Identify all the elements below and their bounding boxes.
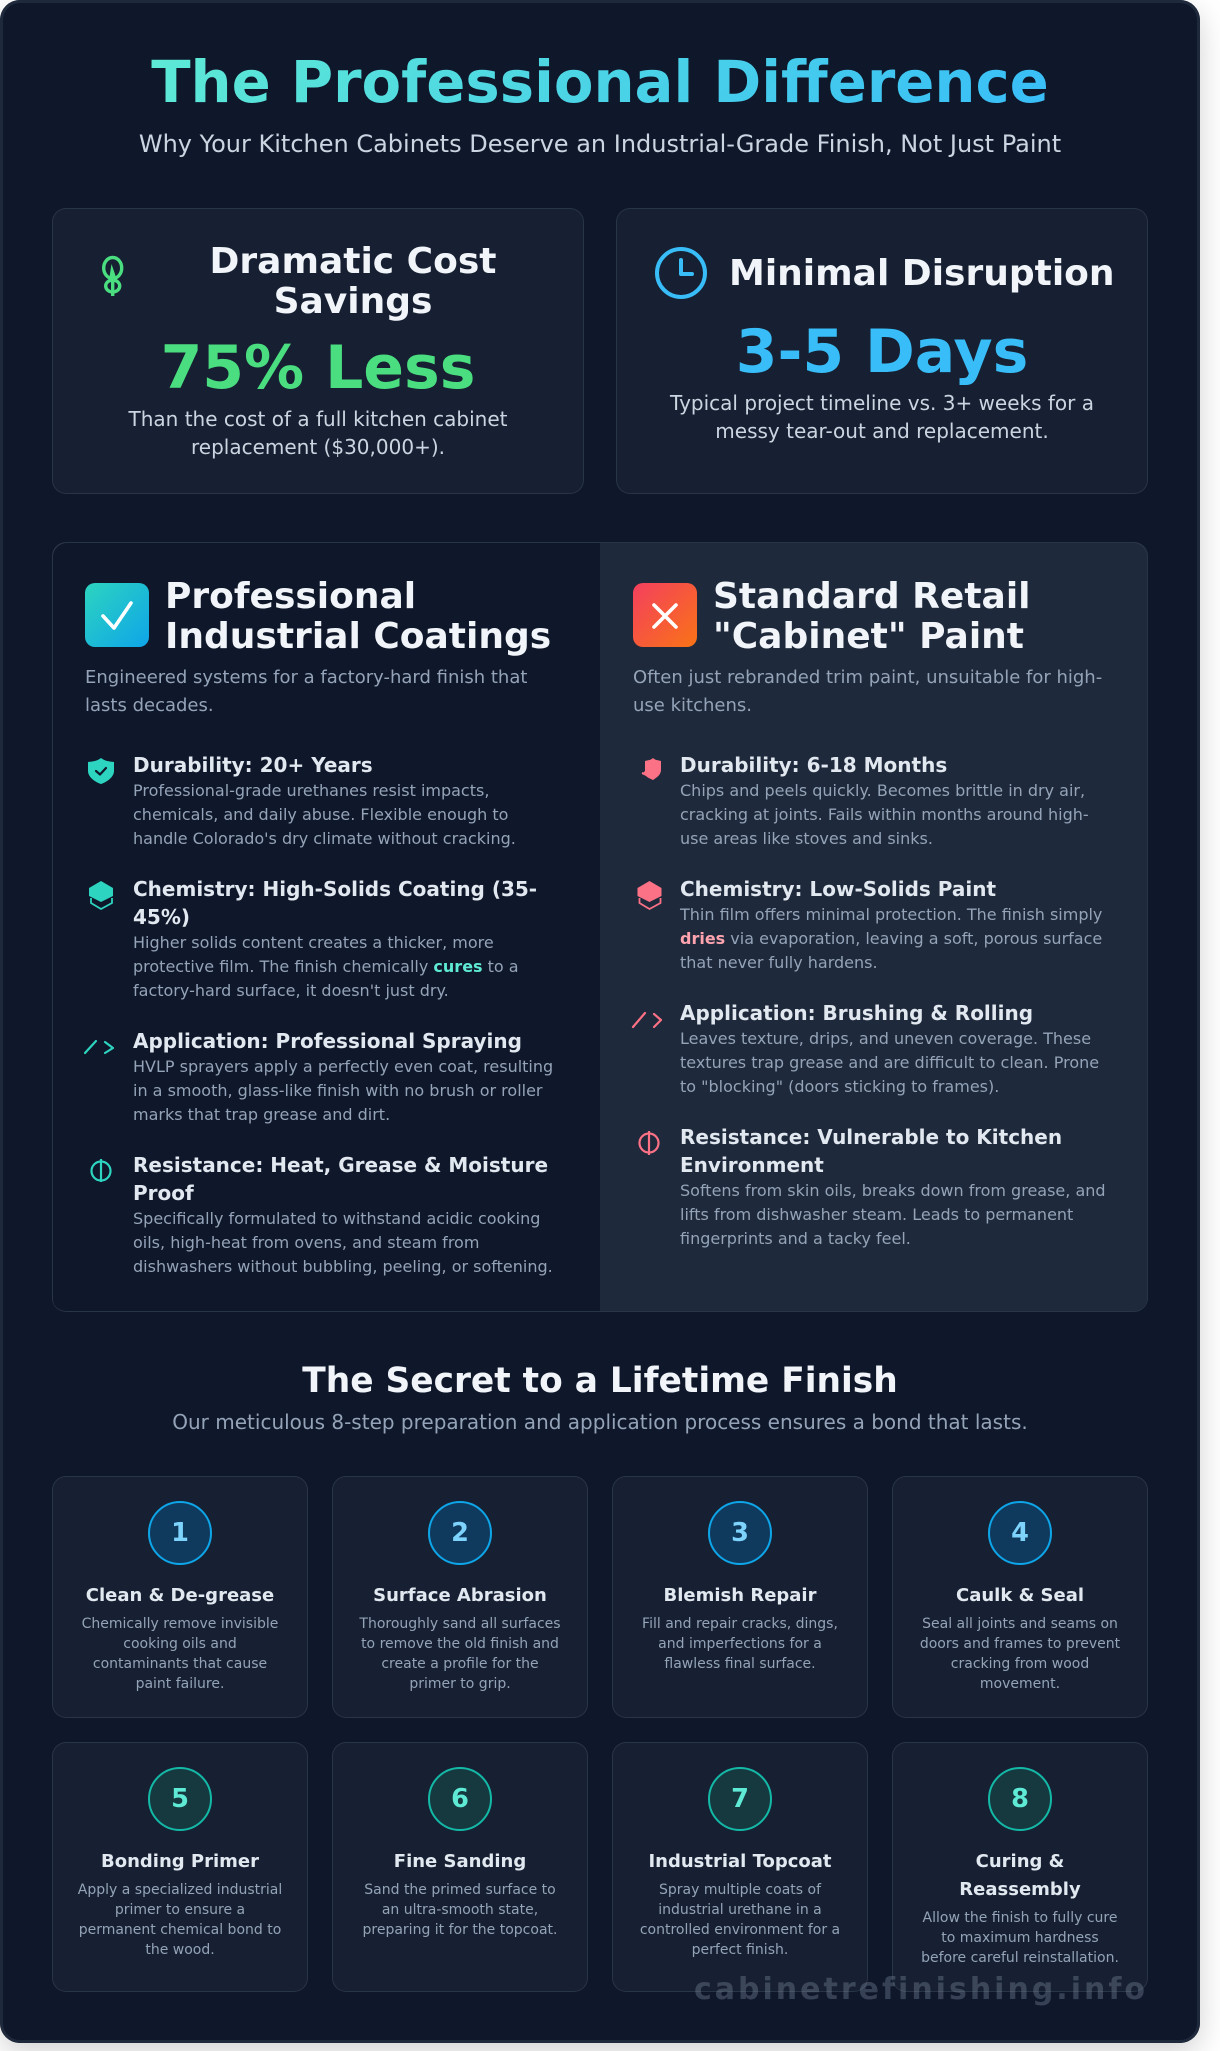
feature: resistance: Proof xyxy=(133,1181,194,1205)
feature: durability xyxy=(642,753,1089,848)
step 7: industrial urethane in a xyxy=(658,1902,822,1918)
feature: application: Application: Brushing & Rolling xyxy=(680,1001,1033,1025)
feature: durability: Durability: 20+ Years xyxy=(133,753,373,777)
feature: chemistry: Chemistry: Low-Solids Paint xyxy=(680,877,996,901)
step 3: Blemish Repair xyxy=(664,1585,816,1606)
feature: application: in a smooth, glass-like finish with no brush or roller xyxy=(133,1081,543,1100)
panel heading: "Cabinet" Paint xyxy=(713,616,1024,657)
step 4: doors and frames to prevent xyxy=(920,1636,1120,1652)
feature: durability: handle Colorado's dry climate without cracking. xyxy=(133,829,516,848)
icon: phi xyxy=(638,1131,660,1155)
step 7: controlled environment for a xyxy=(640,1922,840,1938)
panel intro xyxy=(85,667,527,716)
panel heading xyxy=(713,576,1030,657)
feature: chemistry: Thin film offers minimal protection. The finish simply xyxy=(680,905,1102,924)
card heading xyxy=(210,241,496,322)
step 5: the wood. xyxy=(145,1942,215,1958)
icon: spray xyxy=(84,1040,114,1054)
feature: application: Leaves texture, drips, and uneven coverage. These xyxy=(680,1029,1091,1048)
section heading: The Secret to a Lifetime Finish xyxy=(302,1361,898,1401)
feature: chemistry: protective film. The finish chemically cures to a xyxy=(133,957,519,976)
step 7: Industrial Topcoat xyxy=(648,1851,832,1872)
step 5: permanent chemical bond to xyxy=(79,1922,281,1938)
panel intro: use kitchens. xyxy=(633,695,752,716)
step 6: Fine Sanding xyxy=(394,1851,526,1872)
panel: minimal disruption xyxy=(616,208,1148,494)
panel: retail paint xyxy=(600,542,1148,1312)
feature: application xyxy=(632,1001,1099,1096)
feature: resistance: Resistance: Heat, Grease & Moisture xyxy=(133,1153,548,1177)
step 6: Sand the primed surface to xyxy=(364,1882,556,1898)
panel intro: Engineered systems for a factory-hard finish that xyxy=(85,667,527,688)
feature: application: Application: Professional Spraying xyxy=(133,1029,522,1053)
feature: application xyxy=(84,1029,553,1124)
feature: resistance: Specifically formulated to withstand acidic cooking xyxy=(133,1209,540,1228)
step 8: before careful reinstallation. xyxy=(921,1950,1119,1966)
step 5: Bonding Primer xyxy=(101,1851,259,1872)
step 5: primer to ensure a xyxy=(115,1902,245,1918)
step 1: cooking oils and xyxy=(123,1636,237,1652)
feature: chemistry: factory-hard surface, it doesn't just dry. xyxy=(133,981,449,1000)
description: replacement ($30,000+). xyxy=(191,435,445,459)
step 2: to remove the old finish and xyxy=(361,1636,559,1652)
step 2 xyxy=(332,1476,588,1718)
feature: chemistry: that never fully hardens. xyxy=(680,953,878,972)
icon: clock xyxy=(655,247,707,299)
card heading: Dramatic Cost xyxy=(210,241,496,282)
feature: resistance: oils, high-heat from ovens, and steam from xyxy=(133,1233,479,1252)
step 3: Fill and repair cracks, dings, xyxy=(642,1616,838,1632)
feature: resistance: Softens from skin oils, breaks down from grease, and xyxy=(680,1181,1106,1200)
subtitle: Why Your Kitchen Cabinets Deserve an Industrial-Grade Finish, Not Just Paint xyxy=(139,130,1061,158)
feature: durability: chemicals, and daily abuse. Flexible enough to xyxy=(133,805,508,824)
feature: resistance: Environment xyxy=(680,1153,824,1177)
step 4 xyxy=(892,1476,1148,1718)
feature: resistance: fingerprints and a tacky feel. xyxy=(680,1229,911,1248)
feature: resistance: Resistance: Vulnerable to Kitchen xyxy=(680,1125,1062,1149)
step 4: movement. xyxy=(980,1676,1060,1692)
card heading: Minimal Disruption xyxy=(729,253,1115,294)
step 8: Curing & xyxy=(976,1851,1064,1872)
step 1: paint failure. xyxy=(136,1676,224,1692)
step 5: Apply a specialized industrial xyxy=(78,1882,282,1898)
step 3: flawless final surface. xyxy=(664,1656,816,1672)
feature: chemistry xyxy=(638,877,1102,972)
icon: layers xyxy=(89,881,113,910)
feature: durability: cracking at joints. Fails within months around high- xyxy=(680,805,1089,824)
panel intro: Often just rebranded trim paint, unsuitable for high- xyxy=(633,667,1102,688)
feature: resistance: dishwashers without bubbling, peeling, or softening. xyxy=(133,1257,553,1276)
step 6 xyxy=(332,1742,588,1992)
step 5: 5 xyxy=(171,1784,189,1814)
step 8: to maximum hardness xyxy=(941,1930,1099,1946)
step 1: contaminants that cause xyxy=(93,1656,267,1672)
stat: 3-5 days: 3-5 Days xyxy=(736,317,1028,387)
feature: durability: use areas like stoves and sinks. xyxy=(680,829,933,848)
feature: application: to "blocking" (doors sticking to frames). xyxy=(680,1077,999,1096)
step 4: Seal all joints and seams on xyxy=(922,1616,1118,1632)
feature: chemistry xyxy=(89,877,537,1000)
icon: shield xyxy=(88,758,114,784)
step 3: and imperfections for a xyxy=(658,1636,822,1652)
step 1: 1 xyxy=(171,1518,189,1548)
step 2: 2 xyxy=(451,1518,469,1548)
title: The Professional Difference xyxy=(151,48,1049,116)
step 7: 7 xyxy=(731,1784,749,1814)
description xyxy=(128,407,507,459)
step 5 xyxy=(52,1742,308,1992)
step 7 xyxy=(612,1742,868,1992)
panel intro xyxy=(633,667,1102,716)
feature: durability: Durability: 6-18 Months xyxy=(680,753,947,777)
feature: chemistry: 45%) xyxy=(133,905,190,929)
stat: 75% less: 75% Less xyxy=(161,333,475,403)
panel heading xyxy=(165,576,551,657)
step 8: 8 xyxy=(1011,1784,1029,1814)
step 2: create a profile for the xyxy=(381,1656,539,1672)
icon: layers xyxy=(638,881,662,910)
step 6: 6 xyxy=(451,1784,469,1814)
step 6: an ultra-smooth state, xyxy=(382,1902,538,1918)
feature: durability xyxy=(88,753,516,848)
feature: resistance xyxy=(90,1153,553,1276)
step 1 xyxy=(52,1476,308,1718)
icon: brush xyxy=(632,1012,662,1028)
step 7: perfect finish. xyxy=(692,1942,788,1958)
icon: broken shield xyxy=(642,758,661,780)
step 3: 3 xyxy=(731,1518,749,1548)
panel heading: Industrial Coatings xyxy=(165,616,551,657)
step 4: 4 xyxy=(1011,1518,1029,1548)
feature: application: marks that trap grease and dirt. xyxy=(133,1105,390,1124)
section subheading: Our meticulous 8-step preparation and application process ensures a bond that lasts. xyxy=(172,1410,1028,1434)
description: Than the cost of a full kitchen cabinet xyxy=(129,407,507,431)
step 2: Surface Abrasion xyxy=(373,1585,547,1606)
step 4: Caulk & Seal xyxy=(956,1585,1084,1606)
icon: dollar xyxy=(102,256,124,296)
panel: professional coatings xyxy=(52,542,601,1312)
step 1: Chemically remove invisible xyxy=(82,1616,278,1632)
step 2: Thoroughly sand all surfaces xyxy=(359,1616,561,1632)
panel heading: Standard Retail xyxy=(713,576,1030,617)
feature: resistance xyxy=(638,1125,1106,1248)
step 8: Reassembly xyxy=(959,1879,1081,1900)
step 8: Allow the finish to fully cure xyxy=(923,1910,1117,1926)
step 8 xyxy=(892,1742,1148,1992)
step 3 xyxy=(612,1476,868,1718)
step 6: preparing it for the topcoat. xyxy=(363,1922,557,1938)
icon: x badge xyxy=(633,583,697,647)
watermark: cabinetrefinishing.info xyxy=(694,1972,1148,2007)
panel heading: Professional xyxy=(165,576,416,617)
description: Typical project timeline vs. 3+ weeks for a xyxy=(670,391,1094,415)
icon: check badge xyxy=(85,583,149,647)
icon: phi xyxy=(90,1159,112,1182)
feature: application: textures trap grease and are difficult to clean. Prone xyxy=(680,1053,1099,1072)
panel intro: lasts decades. xyxy=(85,695,214,716)
step 2: primer to grip. xyxy=(409,1676,511,1692)
feature: resistance: lifts from dishwasher steam. Leads to permanent xyxy=(680,1205,1073,1224)
description xyxy=(670,391,1094,443)
feature: chemistry: Chemistry: High-Solids Coating (35- xyxy=(133,877,537,901)
panel: cost savings xyxy=(52,208,584,494)
step 1: Clean & De-grease xyxy=(86,1585,274,1606)
step 7: Spray multiple coats of xyxy=(659,1882,821,1898)
feature: durability: Chips and peels quickly. Becomes brittle in dry air, xyxy=(680,781,1085,800)
feature: application: HVLP sprayers apply a perfectly even coat, resulting xyxy=(133,1057,553,1076)
description: messy tear-out and replacement. xyxy=(715,419,1049,443)
step 4: cracking from wood xyxy=(951,1656,1089,1672)
card heading: Savings xyxy=(274,281,432,322)
feature: chemistry: Higher solids content creates a thicker, more xyxy=(133,933,494,952)
feature: durability: Professional-grade urethanes resist impacts, xyxy=(133,781,489,800)
feature: chemistry: dries via evaporation, leaving a soft, porous surface xyxy=(680,929,1102,948)
